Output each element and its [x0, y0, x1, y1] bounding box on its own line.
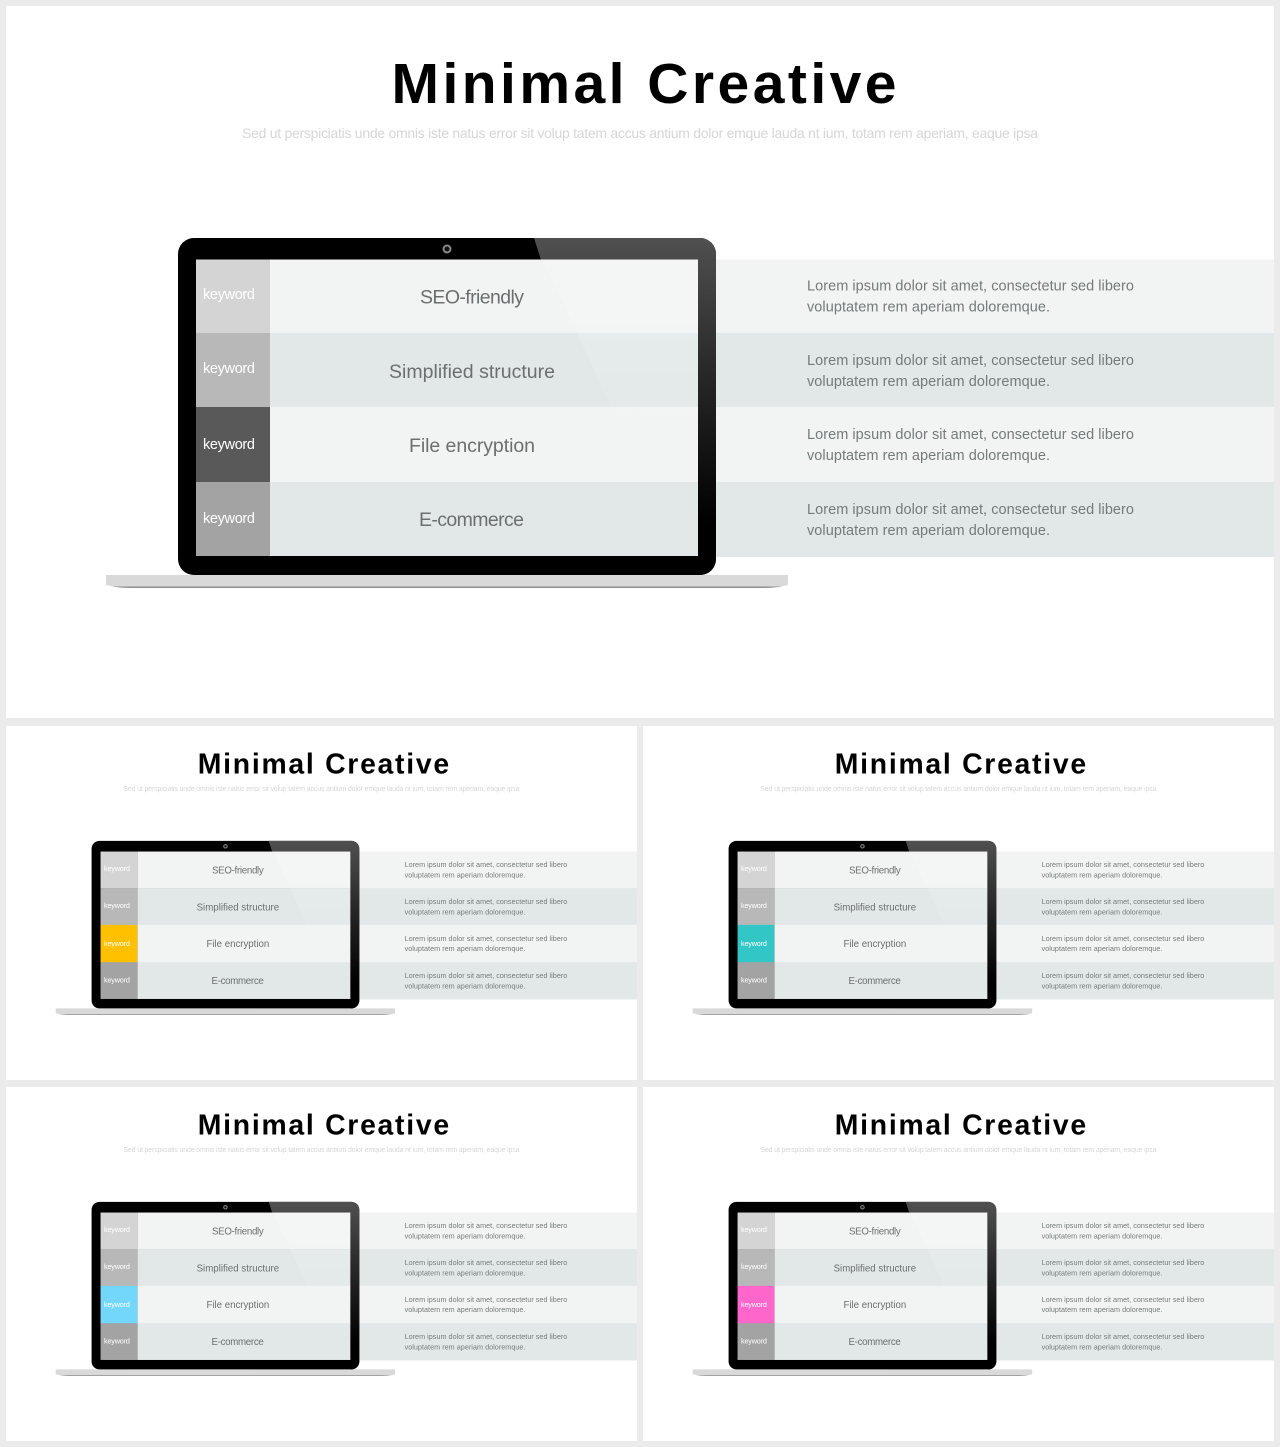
slide 2 subtitle: Sed ut perspiciatis unde omnis iste natus error sit volup tatem accus antium dolor emque lauda nt ium, totam rem aperiam, eaque ipsa	[123, 786, 520, 793]
slide 4 description text: voluptatem rem aperiam doloremque.	[405, 1231, 525, 1240]
slide 2: yellow version	[6, 726, 637, 1080]
slide 2 laptop: keyword	[104, 864, 130, 873]
slide 4 description text	[405, 1221, 567, 1352]
slide 4 subtitle: Sed ut perspiciatis unde omnis iste natus error sit volup tatem accus antium dolor emque lauda nt ium, totam rem aperiam, eaque ipsa	[123, 1147, 520, 1154]
slide 5 description text: Lorem ipsum dolor sit amet, consectetur sed libero	[1042, 1258, 1204, 1267]
slide 2 laptop	[56, 841, 395, 1015]
slide 1 laptop: keyword	[203, 437, 255, 453]
slide 4 laptop: keyword	[104, 1262, 130, 1271]
slide 4 background	[6, 1087, 637, 1441]
slide 1 laptop: keyword	[203, 287, 255, 303]
slide 3 description text: Lorem ipsum dolor sit amet, consectetur sed libero	[1042, 860, 1204, 869]
slide 3 description text: voluptatem rem aperiam doloremque.	[1042, 944, 1162, 953]
slide 3 description text: Lorem ipsum dolor sit amet, consectetur sed libero	[1042, 971, 1204, 980]
slide 5 description text: Lorem ipsum dolor sit amet, consectetur sed libero	[1042, 1295, 1204, 1304]
slide 3 laptop: SEO-friendly	[849, 865, 901, 876]
slide 5 laptop: SEO-friendly	[849, 1226, 901, 1237]
slide 1: large grey version	[6, 6, 1274, 718]
slide 1 laptop: SEO-friendly	[420, 286, 524, 308]
slide 2 laptop: SEO-friendly	[212, 865, 264, 876]
slide 4 laptop: E-commerce	[212, 1337, 264, 1348]
slide 5 description text: voluptatem rem aperiam doloremque.	[1042, 1268, 1162, 1277]
slide 5 laptop: E-commerce	[849, 1337, 901, 1348]
slide 1 description text: Lorem ipsum dolor sit amet, consectetur sed libero	[807, 427, 1134, 443]
slide 4 laptop: keyword	[104, 1300, 130, 1309]
slide 4 laptop	[56, 1202, 395, 1376]
slide 5 description text: voluptatem rem aperiam doloremque.	[1042, 1231, 1162, 1240]
slide 2 description text	[405, 860, 567, 991]
slide 5 description text: Lorem ipsum dolor sit amet, consectetur sed libero	[1042, 1221, 1204, 1230]
slide 4 laptop: File encryption	[207, 1300, 269, 1311]
slide 1 laptop: Simplified structure	[389, 361, 555, 383]
slide 3 title: Minimal Creative	[835, 749, 1086, 781]
slide 3 laptop: File encryption	[844, 939, 906, 950]
slide 5 description text	[1042, 1221, 1204, 1352]
slide 3 description text: Lorem ipsum dolor sit amet, consectetur sed libero	[1042, 934, 1204, 943]
slide 1 laptop	[106, 238, 788, 588]
slide 5 laptop: File encryption	[844, 1300, 906, 1311]
slide 1 description text	[807, 278, 1134, 539]
slide 3 description bands	[991, 852, 1274, 999]
slide 2 description bands	[354, 852, 637, 999]
slide 1 description bands	[706, 260, 1274, 557]
slide 5 description text: Lorem ipsum dolor sit amet, consectetur sed libero	[1042, 1332, 1204, 1341]
slide 3 laptop: keyword	[741, 864, 767, 873]
slide 4 description text: voluptatem rem aperiam doloremque.	[405, 1268, 525, 1277]
slide 5 description text: voluptatem rem aperiam doloremque.	[1042, 1343, 1162, 1352]
slide 2 description text: voluptatem rem aperiam doloremque.	[405, 944, 525, 953]
slide 4 description text: Lorem ipsum dolor sit amet, consectetur sed libero	[405, 1221, 567, 1230]
slide 5: pink version	[643, 1087, 1274, 1441]
slide 4 laptop: SEO-friendly	[212, 1226, 264, 1237]
slide 3 description text: voluptatem rem aperiam doloremque.	[1042, 982, 1162, 991]
slide 4: light blue version	[6, 1087, 637, 1441]
slide 2 laptop: keyword	[104, 939, 130, 948]
slide 2 description text: voluptatem rem aperiam doloremque.	[405, 982, 525, 991]
slide 4 laptop: keyword	[104, 1337, 130, 1346]
slide 2 background	[6, 726, 637, 1080]
slide 1 laptop: File encryption	[409, 435, 535, 457]
slide 3 laptop: Simplified structure	[834, 902, 916, 913]
slide 5 title: Minimal Creative	[835, 1110, 1086, 1142]
slide 1 description text: Lorem ipsum dolor sit amet, consectetur sed libero	[807, 502, 1134, 518]
slide 3 laptop: keyword	[741, 976, 767, 985]
slide 5 description text: voluptatem rem aperiam doloremque.	[1042, 1305, 1162, 1314]
slide 5 laptop: keyword	[741, 1225, 767, 1234]
slide 3 description text: voluptatem rem aperiam doloremque.	[1042, 907, 1162, 916]
slide 5 laptop	[693, 1202, 1032, 1376]
slide 4 description text: voluptatem rem aperiam doloremque.	[405, 1343, 525, 1352]
slide 1 title: Minimal Creative	[392, 52, 896, 116]
slide 2 description text: Lorem ipsum dolor sit amet, consectetur sed libero	[405, 860, 567, 869]
slide 1 description text: Lorem ipsum dolor sit amet, consectetur sed libero	[807, 278, 1134, 294]
slide 5 subtitle: Sed ut perspiciatis unde omnis iste natus error sit volup tatem accus antium dolor emque lauda nt ium, totam rem aperiam, eaque ipsa	[760, 1147, 1157, 1154]
slide 2 description text: voluptatem rem aperiam doloremque.	[405, 870, 525, 879]
slide 2 laptop: E-commerce	[212, 976, 264, 987]
slide 3 background	[643, 726, 1274, 1080]
slide 1 description text: voluptatem rem aperiam doloremque.	[807, 300, 1050, 316]
slide 2 laptop: keyword	[104, 901, 130, 910]
slide 4 description bands	[354, 1213, 637, 1360]
slide 1 laptop: E-commerce	[419, 509, 524, 531]
slide 5 laptop: keyword	[741, 1337, 767, 1346]
slide 2 title: Minimal Creative	[198, 749, 449, 781]
slide 2 description text: Lorem ipsum dolor sit amet, consectetur sed libero	[405, 934, 567, 943]
slide 3: teal version	[643, 726, 1274, 1080]
slide 4 description text: Lorem ipsum dolor sit amet, consectetur sed libero	[405, 1295, 567, 1304]
slide 3 laptop: keyword	[741, 939, 767, 948]
slide 2 description text: voluptatem rem aperiam doloremque.	[405, 907, 525, 916]
slide 2 description text: Lorem ipsum dolor sit amet, consectetur sed libero	[405, 897, 567, 906]
slide 2 description text: Lorem ipsum dolor sit amet, consectetur sed libero	[405, 971, 567, 980]
slide 3 laptop: E-commerce	[849, 976, 901, 987]
slide 5 description bands	[991, 1213, 1274, 1360]
slide 3 description text: voluptatem rem aperiam doloremque.	[1042, 870, 1162, 879]
slide 2 laptop: keyword	[104, 976, 130, 985]
slide 4 description text: voluptatem rem aperiam doloremque.	[405, 1305, 525, 1314]
slide 1 subtitle: Sed ut perspiciatis unde omnis iste natus error sit volup tatem accus antium dolor emque lauda nt ium, totam rem aperiam, eaque ipsa	[242, 125, 1038, 141]
slide 4 title: Minimal Creative	[198, 1110, 449, 1142]
slide 5 laptop: keyword	[741, 1300, 767, 1309]
slide 1 description text: voluptatem rem aperiam doloremque.	[807, 448, 1050, 464]
slide 1 laptop: keyword	[203, 361, 255, 377]
slide 5 laptop: Simplified structure	[834, 1263, 916, 1274]
slide 1 description text: Lorem ipsum dolor sit amet, consectetur sed libero	[807, 353, 1134, 369]
slide 1 background	[6, 6, 1274, 718]
slide 4 description text: Lorem ipsum dolor sit amet, consectetur sed libero	[405, 1332, 567, 1341]
slide 5 background	[643, 1087, 1274, 1441]
slide 5 laptop: keyword	[741, 1262, 767, 1271]
slide 3 laptop	[693, 841, 1032, 1015]
slide 3 description text	[1042, 860, 1204, 991]
slide 4 laptop: Simplified structure	[197, 1263, 279, 1274]
slide 3 subtitle: Sed ut perspiciatis unde omnis iste natus error sit volup tatem accus antium dolor emque lauda nt ium, totam rem aperiam, eaque ipsa	[760, 786, 1157, 793]
slide 4 laptop: keyword	[104, 1225, 130, 1234]
slide 2 laptop: File encryption	[207, 939, 269, 950]
slide 1 laptop: keyword	[203, 511, 255, 527]
slide 1 description text: voluptatem rem aperiam doloremque.	[807, 374, 1050, 390]
slide 3 laptop: keyword	[741, 901, 767, 910]
slide 2 laptop: Simplified structure	[197, 902, 279, 913]
slide 1 description text: voluptatem rem aperiam doloremque.	[807, 523, 1050, 539]
slide 3 description text: Lorem ipsum dolor sit amet, consectetur sed libero	[1042, 897, 1204, 906]
slide 4 description text: Lorem ipsum dolor sit amet, consectetur sed libero	[405, 1258, 567, 1267]
